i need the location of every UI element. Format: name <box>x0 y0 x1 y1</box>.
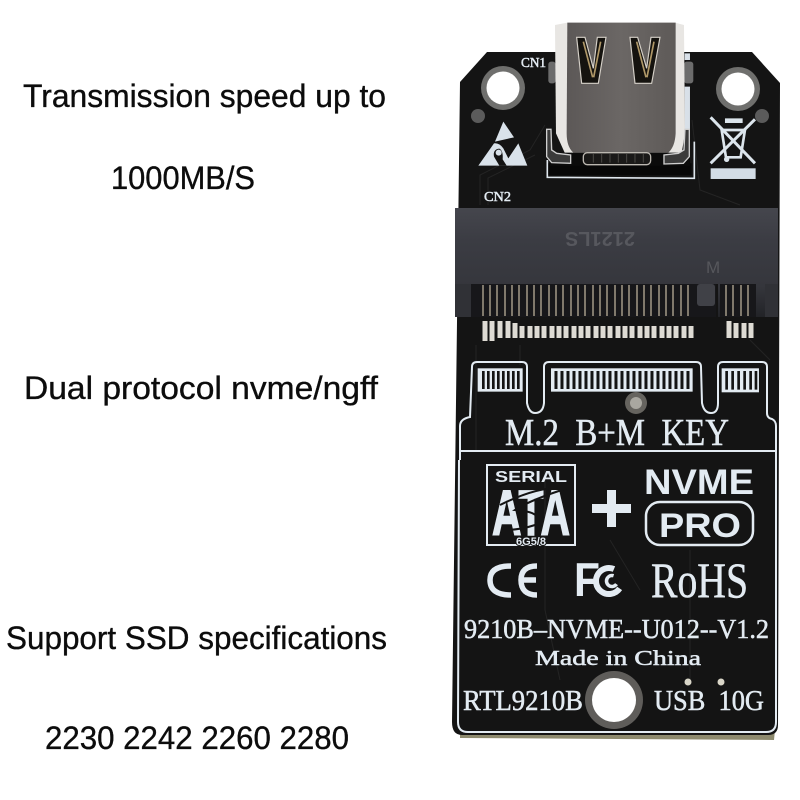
silkscreen divider <box>460 450 776 452</box>
logo: NVME PRO: NVME <box>644 463 754 502</box>
text: dual protocol: Dual protocol nvme/ngff <box>24 370 378 406</box>
logo: Serial ATA: SERIAL <box>495 469 567 486</box>
solder pads <box>485 321 751 341</box>
solder tabs <box>547 129 571 163</box>
logo: NVME PRO <box>644 463 754 545</box>
test pads <box>684 678 724 686</box>
small vias <box>471 109 769 123</box>
shell <box>555 23 685 153</box>
label: USB 10G: USB 10G <box>654 686 764 717</box>
heading: transmission speed <box>23 78 386 196</box>
M.2 connector <box>455 208 778 317</box>
mounting hole left <box>481 66 525 110</box>
PCB edge shadow <box>460 700 778 740</box>
connector pins <box>483 285 748 316</box>
plus sign <box>592 490 631 527</box>
logo: NVME PRO: PRO <box>659 507 741 545</box>
logo: Serial ATA: 6G5/8 <box>516 536 546 548</box>
logo: FCC <box>574 553 627 606</box>
label: M.2 B+M KEY: M.2 B+M KEY <box>505 412 729 454</box>
logo: Serial ATA <box>487 465 575 549</box>
logo: CE <box>490 566 537 595</box>
gold finger marks middle <box>551 368 693 392</box>
gold finger marks right <box>722 368 759 392</box>
PCB traces <box>476 120 770 680</box>
silk outline around port <box>547 142 694 178</box>
label: model number: 9210B–NVME--U012--V1.2 <box>464 614 769 644</box>
logo: RoHS: RoHS <box>651 552 748 608</box>
silkscreen outline <box>458 362 776 732</box>
text: SSD specifications <box>6 620 387 756</box>
port mouth <box>550 153 690 166</box>
adapter board photo <box>452 23 780 740</box>
logo: FCC: F <box>574 553 600 606</box>
moulded mark 2121LS: 2121LS <box>565 227 635 249</box>
mounting hole right <box>716 67 760 111</box>
label: RTL9210B: RTL9210B <box>463 686 583 717</box>
label: made in China: Made in China <box>535 646 702 670</box>
connector mouth <box>470 284 716 317</box>
screw via <box>625 392 647 414</box>
USB-C port <box>547 23 694 178</box>
text: SSD specifications: Support SSD specifications <box>6 620 387 656</box>
moulded mark M: M <box>706 258 720 277</box>
icon: WEEE crossed bin <box>711 117 756 179</box>
label: CN2: CN2 <box>484 190 511 205</box>
heading: transmission speed: 1000MB/S <box>111 160 255 196</box>
V slot right <box>630 37 660 83</box>
gold finger marks left <box>478 368 523 392</box>
label: CN1: CN1 <box>521 56 546 71</box>
icon: ESD warning <box>478 122 527 166</box>
PCB body <box>452 52 780 735</box>
bottom mounting hole <box>585 671 643 729</box>
logo: Serial ATA: ATA <box>492 477 570 549</box>
text: SSD specifications: 2230 2242 2260 2280 <box>45 720 349 756</box>
heading: transmission speed: Transmission speed up to <box>23 78 386 114</box>
V slot left <box>577 37 606 83</box>
